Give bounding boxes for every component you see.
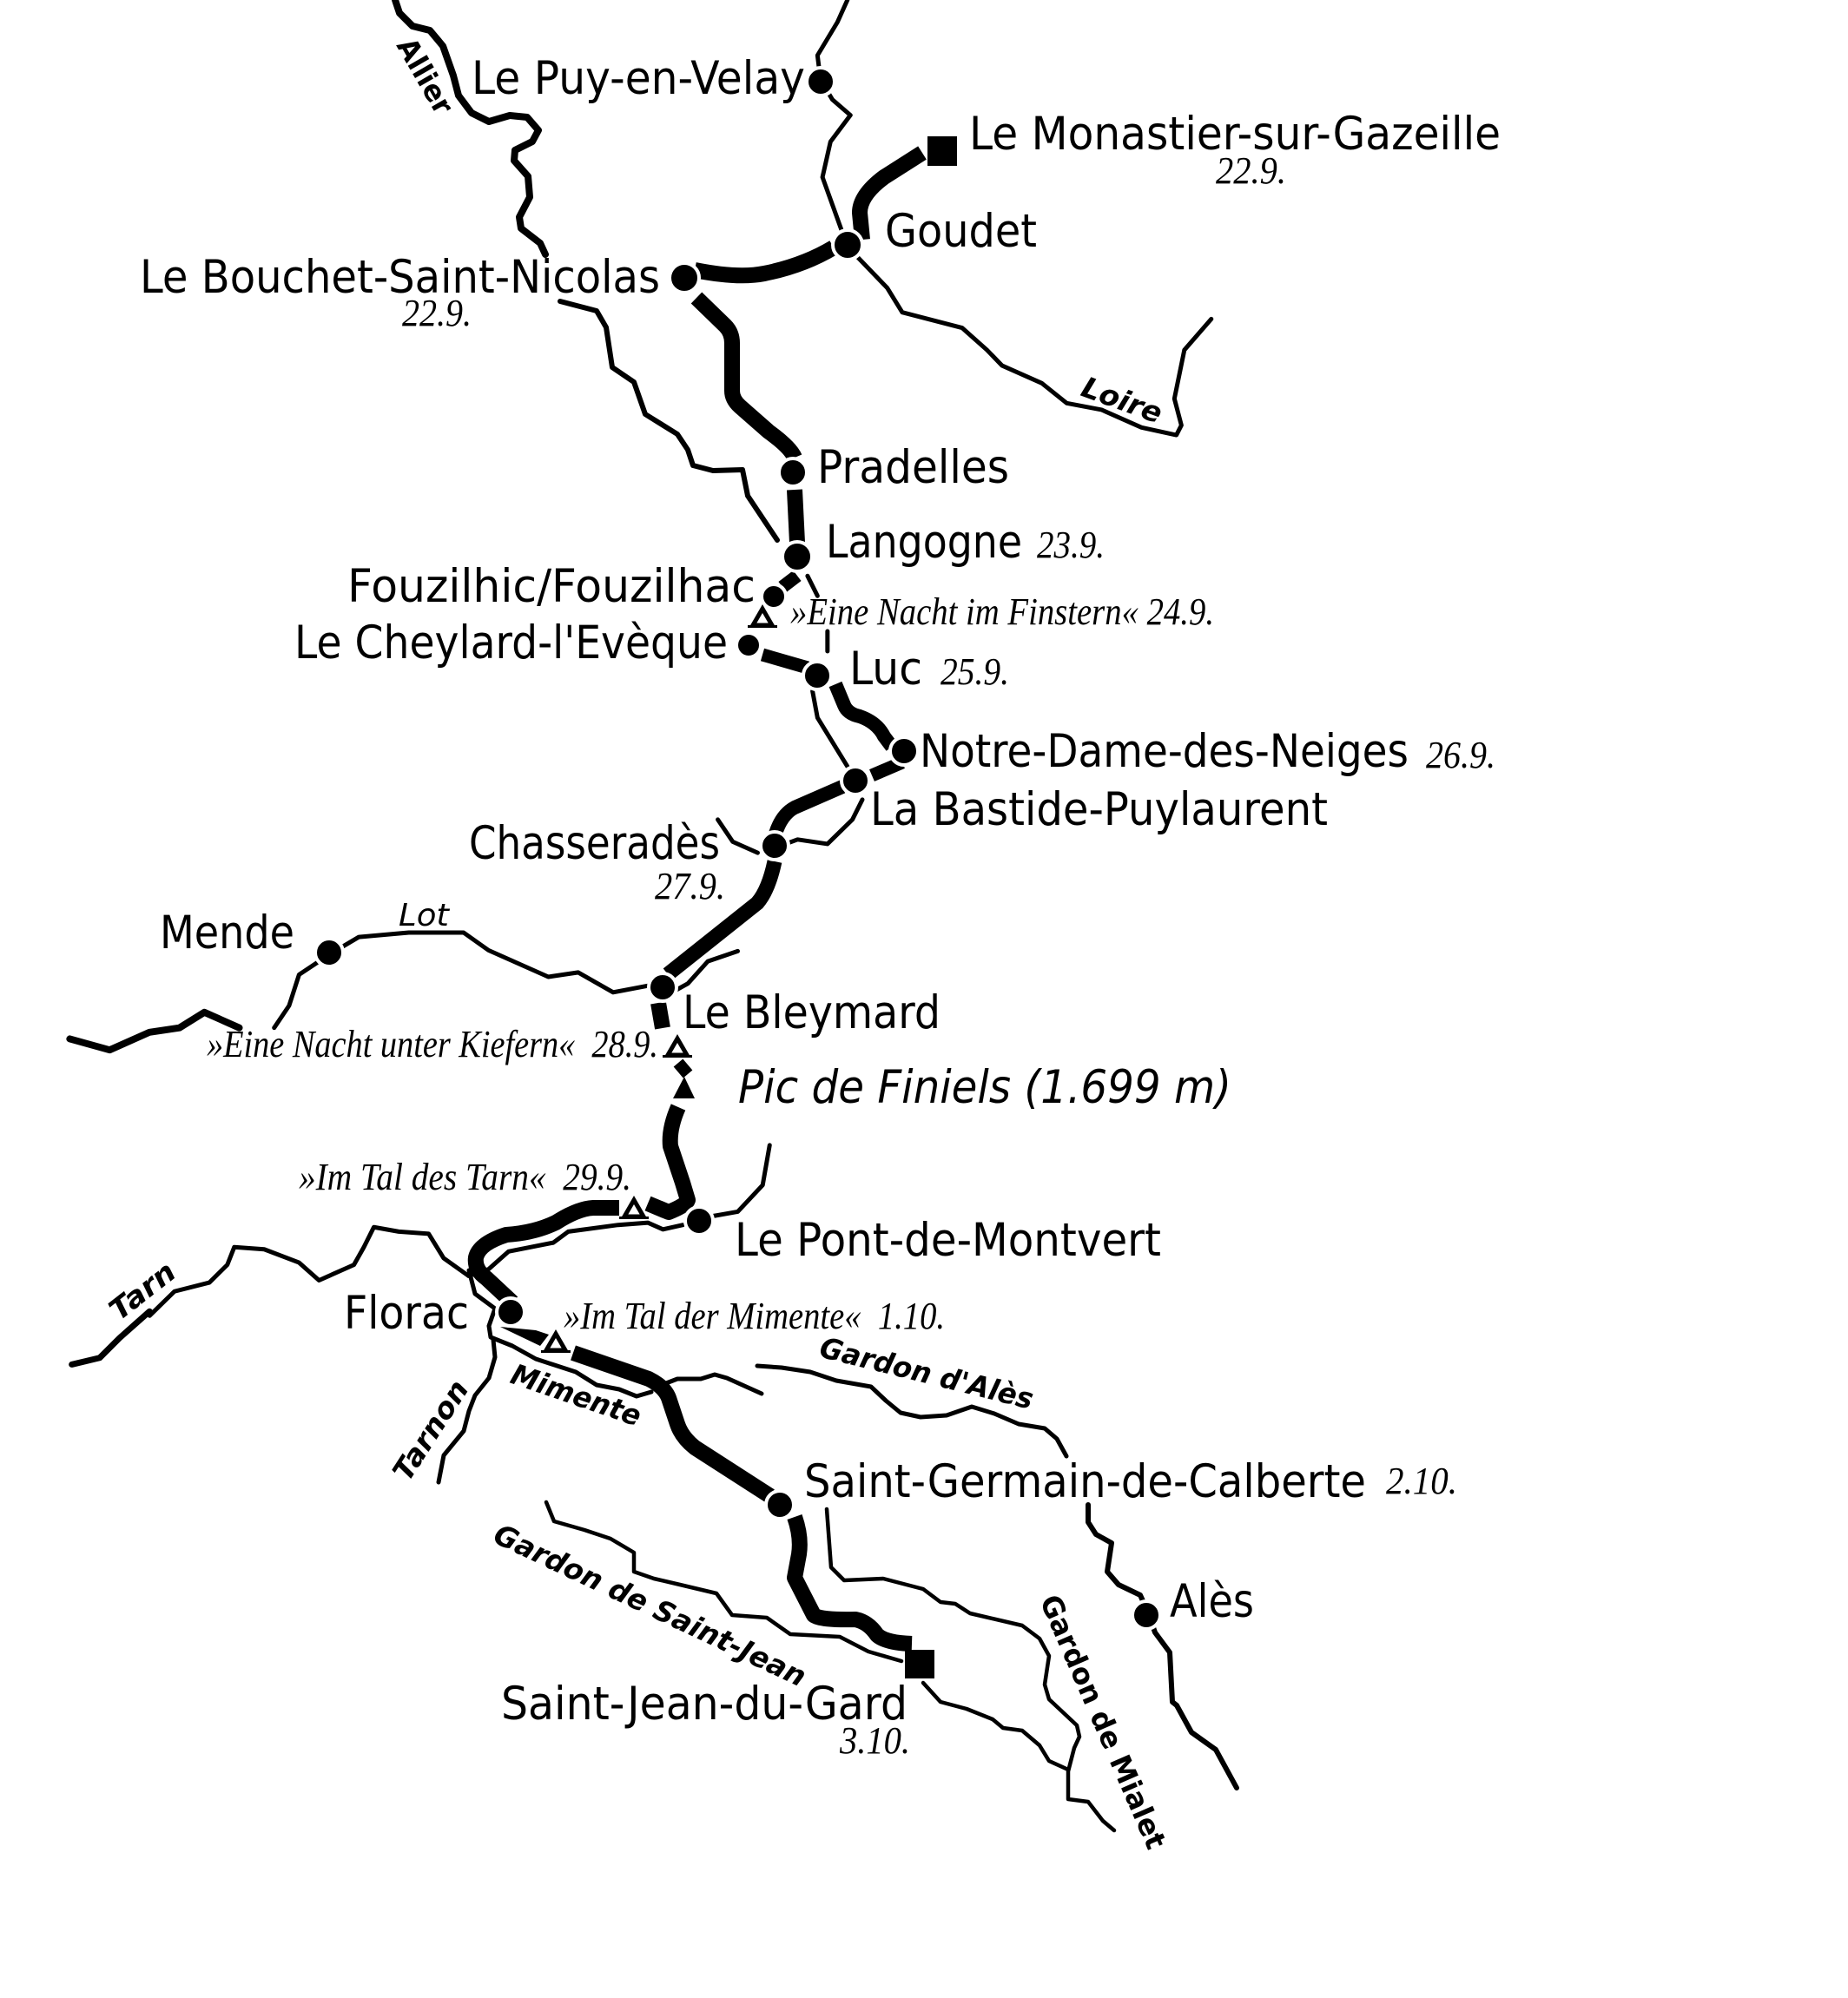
river names bbox=[102, 31, 1173, 1854]
place names: Le Puy-en-Velay bbox=[472, 52, 805, 105]
dates and stage notes: »Eine Nacht im Finstern« 24.9. bbox=[790, 590, 1214, 633]
place names: Alès bbox=[1170, 1575, 1254, 1628]
dates and stage notes bbox=[207, 149, 1495, 1762]
dates and stage notes: 26.9. bbox=[1426, 734, 1495, 776]
place names bbox=[140, 52, 1501, 1731]
hiking route bbox=[476, 153, 922, 1644]
dates and stage notes: 27.9. bbox=[655, 865, 725, 907]
town markers bbox=[315, 68, 1160, 1678]
place names: Fouzilhic/Fouzilhac bbox=[347, 560, 756, 613]
place names: Saint-Germain-de-Calberte bbox=[804, 1455, 1366, 1508]
dates and stage notes: 2.10. bbox=[1386, 1460, 1457, 1502]
place names: Goudet bbox=[885, 205, 1037, 258]
dates and stage notes: 3.10. bbox=[839, 1719, 910, 1762]
river names: Allier bbox=[390, 31, 461, 121]
place names: Pic de Finiels (1.699 m) bbox=[738, 1061, 1231, 1114]
dates and stage notes: »Eine Nacht unter Kiefern« 28.9. bbox=[207, 1023, 658, 1065]
dates and stage notes: 22.9. bbox=[1216, 149, 1286, 192]
river names: Gardon d'Alès bbox=[816, 1330, 1037, 1416]
place names: Le Pont-de-Montvert bbox=[735, 1214, 1161, 1267]
river names: Mimente bbox=[506, 1357, 646, 1433]
place names: Florac bbox=[344, 1287, 469, 1340]
place names: Le Monastier-sur-Gazeille bbox=[969, 108, 1501, 161]
dates and stage notes: 22.9. bbox=[402, 292, 472, 334]
place names: Langogne bbox=[826, 516, 1022, 569]
place names: La Bastide-Puylaurent bbox=[870, 783, 1328, 836]
river names: Tarnon bbox=[386, 1374, 476, 1487]
river names: Loire bbox=[1077, 370, 1167, 430]
dates and stage notes: »Im Tal der Mimente« 1.10. bbox=[564, 1295, 945, 1337]
camp and summit triangles bbox=[541, 609, 777, 1353]
place names: Pradelles bbox=[817, 441, 1009, 494]
place names: Notre-Dame-des-Neiges bbox=[920, 725, 1409, 778]
place names: Luc bbox=[849, 643, 922, 696]
place names: Chasseradès bbox=[469, 817, 720, 870]
place names: Le Cheylard-l'Evèque bbox=[294, 617, 728, 669]
dates and stage notes: »Im Tal des Tarn« 29.9. bbox=[299, 1156, 631, 1198]
river names: Gardon de Mialet bbox=[1033, 1590, 1173, 1854]
river names: Tarn bbox=[102, 1255, 182, 1327]
place names: Mende bbox=[160, 907, 294, 959]
river names: Gardon de Saint-Jean bbox=[489, 1517, 812, 1693]
place names: Le Bleymard bbox=[683, 986, 940, 1039]
rivers bbox=[69, 0, 1237, 1830]
place names: Saint-Jean-du-Gard bbox=[501, 1678, 908, 1731]
river names: Lot bbox=[399, 898, 451, 933]
place names: Le Bouchet-Saint-Nicolas bbox=[140, 251, 660, 304]
dates and stage notes: 25.9. bbox=[940, 650, 1009, 693]
dates and stage notes: 23.9. bbox=[1037, 524, 1105, 566]
